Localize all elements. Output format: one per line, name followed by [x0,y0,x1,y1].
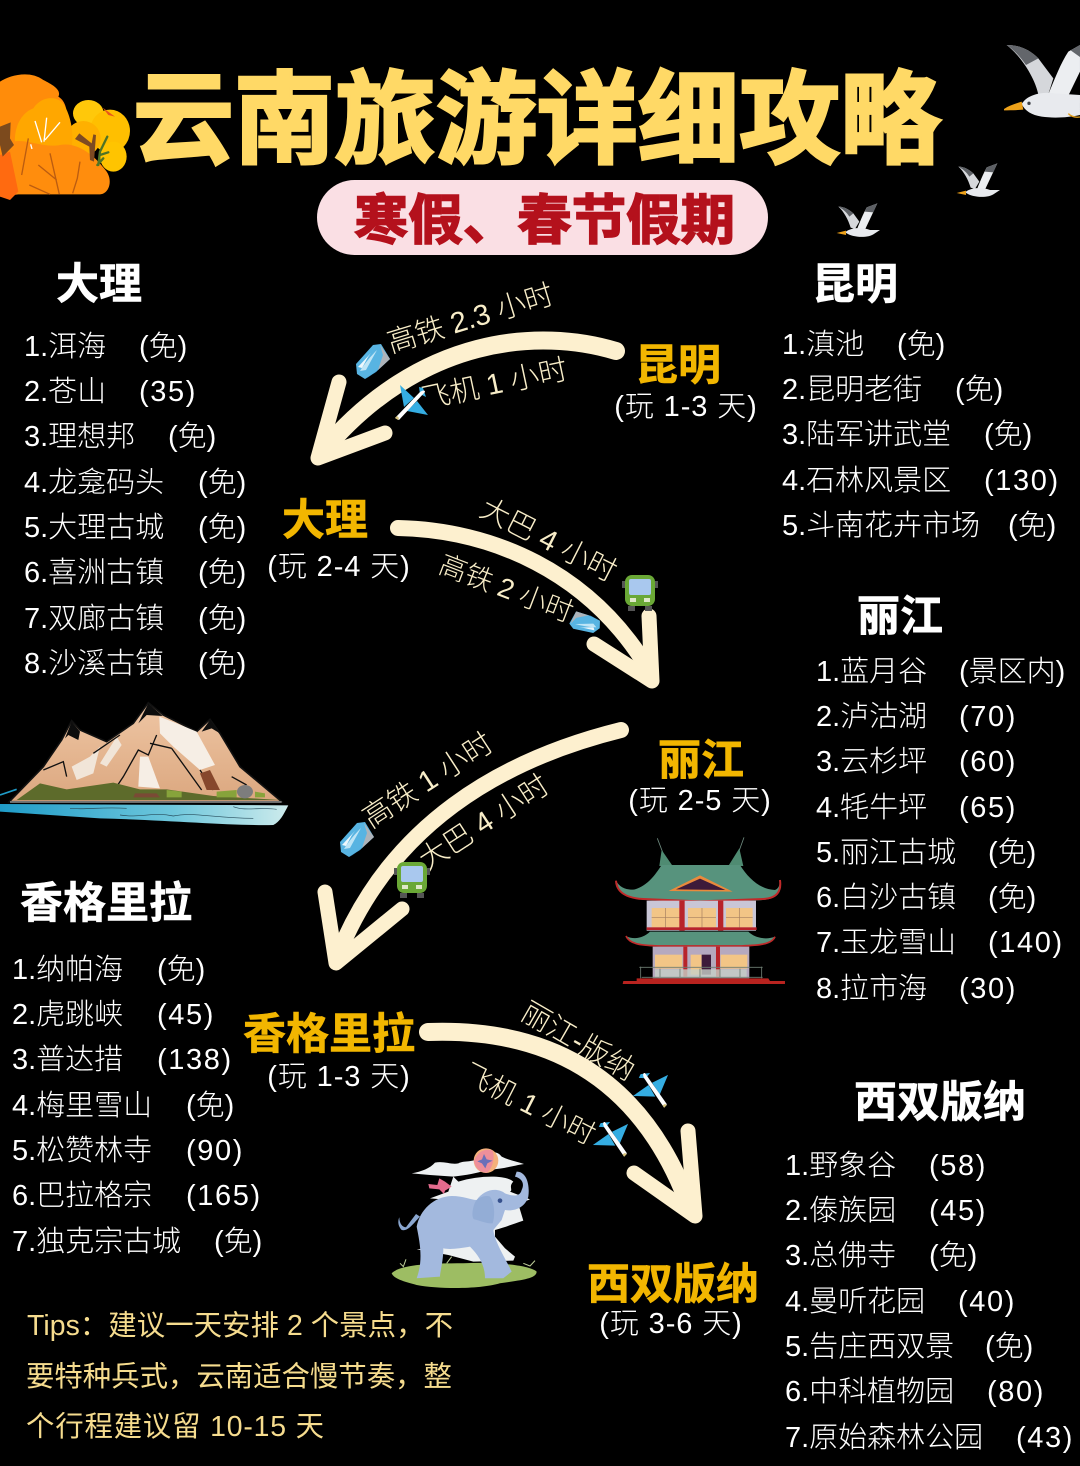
body [417,1172,529,1278]
grass [392,1263,537,1288]
route label: 高铁 2.3 小时: 高铁 2.3 小时 [383,278,558,360]
list: 西双版纳 spots: (免) [985,1330,1033,1363]
list: 大理 spots: 5.大理古城 [24,512,164,544]
list: 丽江 spots: (30) [959,973,1017,1005]
list: 香格里拉 spots: (45) [157,999,215,1031]
list: 昆明 spots: 4.石林风景区 [782,465,951,497]
list: 西双版纳 spots: 2.傣族园 [785,1195,896,1227]
heading: 西双版纳: 西双版纳 [854,1079,1026,1127]
list: 昆明 spots: (130) [984,465,1060,497]
route label: 高铁 2 小时: 高铁 2 小时 [435,549,577,628]
route label: 大巴 4 小时 to 丽江 [475,492,658,611]
list: 昆明 spots: 3.陆军讲武堂 [782,419,951,451]
list: 大理 spots: 2.苍山 [24,376,106,408]
route label: 大巴 4 小时 to 丽江: 大巴 4 小时 [475,492,622,589]
list: 香格里拉 spots: (免) [214,1225,262,1258]
arrow: 昆明 to 大理 [318,340,616,458]
stop label: 昆明 [614,342,758,423]
list: 香格里拉 spots: 5.松赞林寺 [12,1135,152,1167]
list: 香格里拉 spots: (138) [157,1044,233,1076]
list: 丽江 spots: (免) [988,881,1036,914]
icon: bus [622,575,658,611]
list: 香格里拉 spots: (免) [157,953,205,986]
arrow: 丽江 to 香格里拉 [325,730,621,963]
arrow: 香格里拉 to 西双版纳 [428,1032,695,1216]
stop label: 大理 [267,497,411,583]
list: 丽江 spots: 4.牦牛坪 [816,792,927,824]
list: 西双版纳 spots: (40) [958,1286,1016,1318]
list: 大理 spots: (免) [198,466,246,499]
heading: 丽江: 丽江 [857,593,943,641]
stop label: 大理: (玩 2-4 天) [267,551,411,583]
ball [474,1148,498,1173]
list: 昆明 spots: (免) [984,418,1032,451]
icon: pagoda building [616,837,785,984]
panel: 丽江 attractions [816,593,1065,1005]
list: 昆明 spots: (免) [955,373,1003,406]
list: 香格里拉 spots: (免) [186,1089,234,1122]
list: 香格里拉 spots: (165) [186,1180,262,1212]
list: 丽江 spots: 8.拉市海 [816,973,927,1005]
tips: 个行程建议留 10-15 天 [26,1411,324,1443]
list: 昆明 spots: (免) [897,328,945,361]
list: 香格里拉 spots: 7.独克宗古城 [12,1226,181,1258]
list: 大理 spots: 7.双廊古镇 [24,603,164,635]
stop label: 昆明: (玩 1-3 天) [614,391,758,423]
route label: 大巴 4 小时 to 香格里拉: 大巴 4 小时 [413,768,555,877]
tips: 要特种兵式，云南适合慢节奏，整 [26,1361,452,1393]
list: 香格里拉 spots: 6.巴拉格宗 [12,1180,152,1212]
list: 大理 spots: (免) [198,556,246,589]
title: 云南旅游详细攻略 [133,65,941,177]
list: 丽江 spots: (景区内) [959,655,1065,688]
stop label: 西双版纳 [587,1261,759,1340]
icon: train [566,603,604,641]
list: 大理 spots: 8.沙溪古镇 [24,648,164,680]
list: 丽江 spots: 2.泸沽湖 [816,701,927,733]
list: 香格里拉 spots: 2.虎跳峡 [12,999,123,1031]
stop label: 昆明: 昆明 [635,342,721,390]
list: 大理 spots: (免) [198,511,246,544]
list: 昆明 spots: 2.昆明老街 [782,374,922,406]
list: 丽江 spots: (65) [959,792,1017,824]
list: 丽江 spots: (免) [988,836,1036,869]
list: 昆明 spots: (免) [1008,509,1056,542]
list: 香格里拉 spots [12,953,262,1258]
route label: 高铁 1 小时: 高铁 1 小时 [357,726,499,835]
heading: 昆明: 昆明 [812,261,898,309]
stop label: 香格里拉: (玩 1-3 天) [267,1061,411,1093]
subtitle pill: 寒假、春节假期 [354,191,735,251]
panel: 昆明 attractions [782,261,1060,542]
list: 丽江 spots: 3.云杉坪 [816,746,927,778]
list: 西双版纳 spots: (80) [987,1376,1045,1408]
icon: mountains and lake [0,703,288,825]
panel: 西双版纳 attractions [785,1079,1074,1454]
icon: plane [592,1118,633,1157]
icon: plane [395,385,428,420]
stop label: 大理: 大理 [282,497,368,545]
list: 丽江 spots: (70) [959,701,1017,733]
panel: 大理 attractions [24,261,246,680]
list: 西双版纳 spots: 3.总佛寺 [785,1240,896,1272]
route label: 高铁 2.3 小时 [356,278,558,379]
tips: Tips：建议一天安排 2 个景点，不 [27,1310,453,1342]
arrow: 大理 to 丽江 [398,528,652,681]
stop label: 香格里拉 [243,1011,415,1093]
icon: large seagull [1004,45,1080,118]
icon: small seagull left [837,203,880,237]
list: 昆明 spots: 1.滇池 [782,329,864,361]
list: 西双版纳 spots: 1.野象谷 [785,1150,896,1182]
list: 西双版纳 spots: 7.原始森林公园 [785,1422,983,1454]
list: 大理 spots: 3.理想邦 [24,421,135,453]
icon: bus [394,862,430,898]
tail [398,1214,420,1230]
list: 大理 spots: 6.喜洲古镇 [24,557,164,589]
list: 丽江 spots: 5.丽江古城 [816,837,956,869]
list: 西双版纳 spots: (43) [1016,1422,1074,1454]
route label: 飞机 1 小时 to 西双版纳: 飞机 1 小时 [458,1058,600,1151]
bird [428,1178,452,1194]
stop label: 丽江: (玩 2-5 天) [628,785,772,817]
list: 香格里拉 spots: 4.梅里雪山 [12,1090,152,1122]
list: 大理 spots: (35) [139,376,197,408]
list: 大理 spots: (免) [198,647,246,680]
icon: autumn trees [0,74,130,200]
list: 昆明 spots [782,328,1060,542]
list: 西双版纳 spots: (45) [929,1195,987,1227]
stop label: 香格里拉: 香格里拉 [243,1011,415,1059]
route label: 飞机 1 小时: 飞机 1 小时 [419,353,570,416]
stop label: 丽江 [628,737,772,817]
list: 香格里拉 spots: (90) [186,1135,244,1167]
list: 大理 spots: 1.洱海 [24,331,106,363]
stop label: 西双版纳: (玩 3-6 天) [599,1308,743,1340]
list: 西双版纳 spots: (58) [929,1150,987,1182]
heading: 香格里拉: 香格里拉 [20,880,192,928]
list: 丽江 spots: 6.白沙古镇 [816,882,956,914]
route label: 丽江-版纳 [516,995,673,1108]
icon: elephant with ball [392,1148,537,1288]
tips [26,1310,453,1443]
list: 丽江 spots: 1.蓝月谷 [816,656,927,688]
list: 大理 spots: (免) [198,602,246,635]
icon: plane [632,1069,673,1108]
icon: train [340,822,374,857]
list: 西双版纳 spots: 6.中科植物园 [785,1376,954,1408]
list: 大理 spots: 4.龙龛码头 [24,467,164,499]
subtitle pill [317,180,768,255]
list: 丽江 spots: (60) [959,746,1017,778]
list: 香格里拉 spots: 3.普达措 [12,1044,123,1076]
icon: small seagull right [957,163,1000,197]
list: 丽江 spots: 7.玉龙雪山 [816,927,956,959]
route label: 丽江-版纳: 丽江-版纳 [516,995,641,1087]
icon: train [356,344,390,379]
list: 西双版纳 spots: (免) [929,1239,977,1272]
list: 大理 spots: (免) [168,420,216,453]
heading: 大理: 大理 [56,261,142,309]
list: 西双版纳 spots: 5.告庄西双景 [785,1331,954,1363]
stop label: 西双版纳: 西双版纳 [587,1261,759,1309]
clouds [412,1152,530,1262]
list: 香格里拉 spots: 1.纳帕海 [12,954,123,986]
list: 西双版纳 spots: 4.曼听花园 [785,1286,925,1318]
list: 大理 spots: (免) [139,330,187,363]
list: 丽江 spots [816,655,1065,1005]
list: 西双版纳 spots [785,1149,1074,1454]
list: 大理 spots [24,330,246,680]
list: 昆明 spots: 5.斗南花卉市场 [782,510,980,542]
panel: 香格里拉 attractions [12,880,262,1258]
list: 丽江 spots: (140) [988,927,1064,959]
stop label: 丽江: 丽江 [658,737,744,785]
